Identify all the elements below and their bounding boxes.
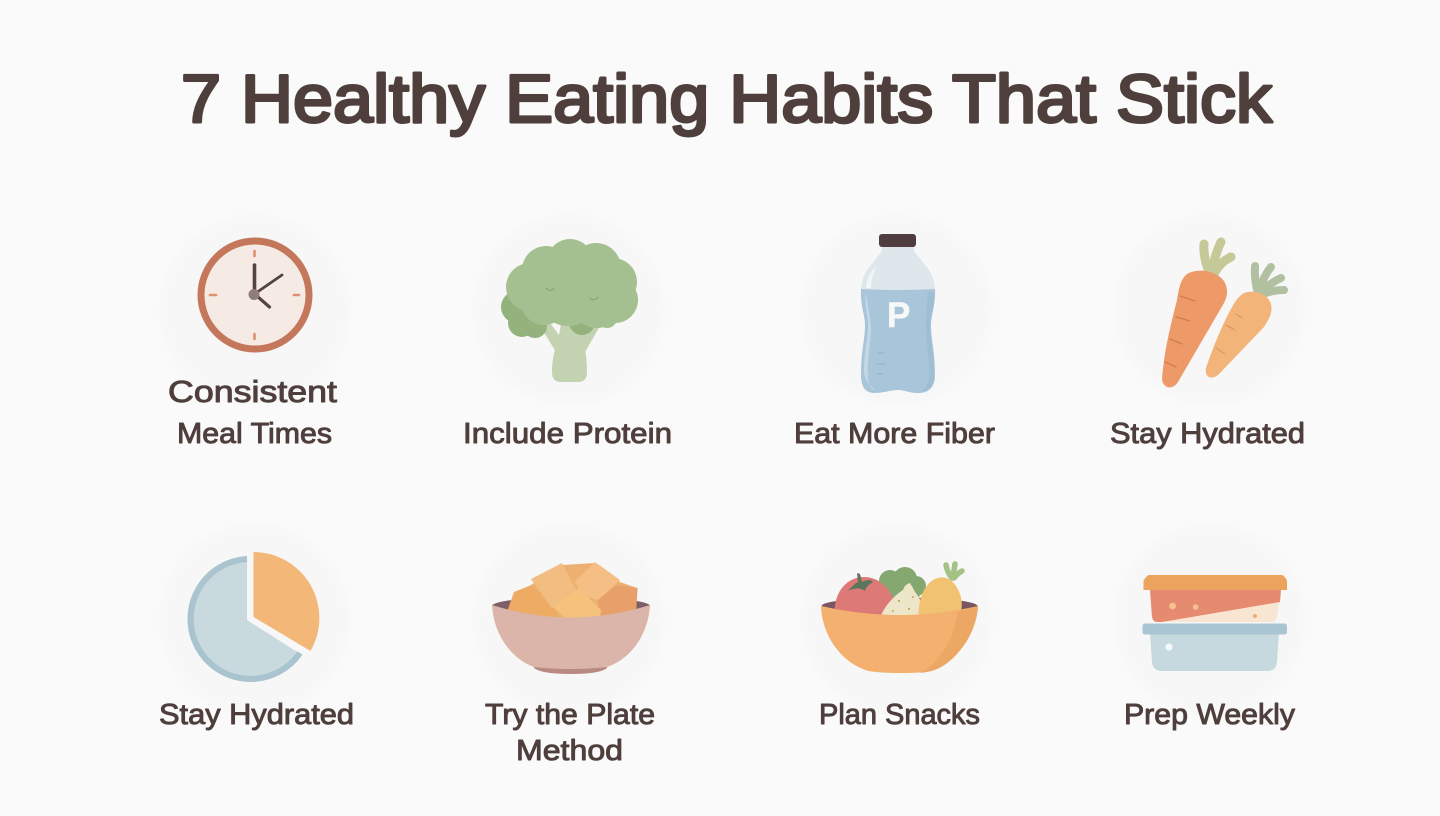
icon: pie chart	[187, 552, 319, 682]
bottle cap	[879, 234, 916, 247]
panel: plan snacks	[797, 520, 997, 731]
icon: stacked containers	[1142, 575, 1287, 671]
title: 7 Healthy Eating Habits That Stick	[181, 61, 1273, 137]
panel: try the plate method	[469, 520, 669, 767]
label: stay hydrated: Stay Hydrated	[1110, 418, 1305, 450]
label: consistent meal times	[168, 374, 337, 450]
icon: water bottle	[861, 234, 935, 393]
label: try the plate method: Method	[516, 735, 623, 767]
label: eat more fiber: Eat More Fiber	[794, 418, 995, 450]
panel: stay hydrated pie	[155, 520, 355, 731]
label: plan snacks: Plan Snacks	[819, 699, 980, 731]
label: include protein: Include Protein	[463, 418, 672, 450]
panel: eat more fiber	[794, 210, 997, 450]
label: try the plate method	[485, 699, 655, 767]
panel: include protein	[463, 210, 672, 450]
panel: prep weekly	[1110, 520, 1310, 731]
icon: bowl of chunks	[492, 562, 650, 674]
label: stay hydrated: Stay Hydrated	[159, 699, 354, 731]
bottle label letter: P	[887, 296, 910, 335]
icon: broccoli	[501, 239, 638, 382]
label: try the plate method: Try the Plate	[485, 699, 655, 731]
label: consistent meal times: Consistent	[168, 374, 337, 409]
panel: consistent meal times	[155, 210, 355, 450]
icon: carrots	[1162, 242, 1284, 387]
label: consistent meal times: Meal Times	[177, 418, 332, 450]
label: prep weekly: Prep Weekly	[1124, 699, 1296, 731]
icon: snack bowl	[821, 564, 978, 673]
icon: clock	[201, 241, 309, 349]
panel: stay hydrated carrots	[1110, 210, 1310, 450]
